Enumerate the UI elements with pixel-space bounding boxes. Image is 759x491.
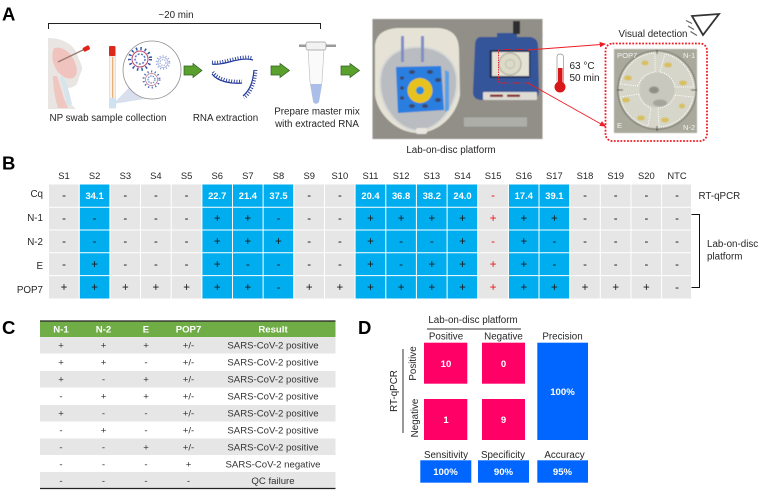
metric: accuracy bbox=[537, 450, 588, 483]
row POP7 values: + bbox=[306, 282, 313, 294]
table row 5 bbox=[58, 408, 319, 420]
table row 8: - bbox=[102, 460, 105, 470]
row POP7 values: + bbox=[337, 282, 344, 294]
header: lab-on-disc platform: Lab-on-disc platform bbox=[428, 315, 518, 326]
row N-1 values: + bbox=[490, 213, 497, 225]
precision block bbox=[537, 343, 588, 440]
metric: specificity: Specificity bbox=[481, 450, 525, 461]
row E values: + bbox=[490, 259, 497, 271]
row Cq values: - bbox=[675, 190, 679, 202]
column headers: S17 bbox=[546, 170, 563, 181]
label: prepare master mix: with extracted RNA bbox=[274, 119, 359, 130]
metric: specificity: 90% bbox=[494, 467, 514, 478]
zoom lines from device to disc bbox=[528, 42, 605, 126]
column headers: S2 bbox=[89, 170, 100, 181]
row POP7 values: + bbox=[153, 282, 160, 294]
row N-1 values: - bbox=[154, 213, 158, 225]
column headers: S7 bbox=[242, 170, 254, 181]
row E values: - bbox=[62, 259, 66, 271]
row Cq values: 17.4 bbox=[515, 190, 534, 201]
arrow 1 bbox=[184, 64, 202, 78]
row Cq values: 21.4 bbox=[239, 190, 258, 201]
table row 6: +/- bbox=[183, 426, 194, 436]
row Cq values: - bbox=[338, 190, 342, 202]
column label: negative: Negative bbox=[484, 332, 523, 342]
table row 6: - bbox=[144, 426, 148, 436]
row Cq values: 36.8 bbox=[392, 190, 410, 201]
row Cq values: 34.1 bbox=[85, 190, 104, 201]
label: 63 °C, 50 min: 63 °C bbox=[570, 61, 595, 72]
table row 7 bbox=[59, 442, 319, 454]
row N-1 values: - bbox=[338, 213, 342, 225]
metric: sensitivity: Sensitivity bbox=[424, 450, 468, 461]
table row 6: - bbox=[59, 426, 63, 436]
panel D: confusion matrix bbox=[358, 315, 588, 483]
table row 3: + bbox=[143, 374, 149, 386]
row N-1 values: + bbox=[245, 213, 252, 225]
column headers: S18 bbox=[577, 170, 593, 181]
cell TP 10: 10 bbox=[441, 359, 451, 370]
row N-2 values: - bbox=[430, 236, 434, 248]
row axis: RT-qPCR bbox=[389, 349, 403, 433]
panel letter A: A bbox=[2, 4, 15, 24]
row Cq values: - bbox=[583, 190, 587, 202]
table row 1 bbox=[58, 340, 319, 352]
row Cq values: 20.4 bbox=[361, 190, 380, 201]
cell FP 1: 1 bbox=[443, 415, 449, 426]
time bracket ~20 min: ~20 min bbox=[158, 10, 194, 21]
row N-2 values: - bbox=[338, 236, 342, 248]
label: RT-qPCR: RT-qPCR bbox=[698, 191, 740, 202]
table row 8: + bbox=[186, 460, 192, 470]
metric: sensitivity bbox=[420, 450, 471, 483]
table row 3: - bbox=[102, 374, 105, 386]
table row 4: SARS-CoV-2 positive bbox=[227, 392, 319, 402]
table row 8 bbox=[59, 460, 320, 470]
illustration: swab tube bbox=[109, 46, 150, 108]
column headers: S6 bbox=[211, 170, 223, 181]
disc labels: N-1 bbox=[683, 51, 695, 60]
row N-2 values: - bbox=[675, 236, 679, 248]
table row 1: + bbox=[58, 340, 64, 352]
row N-2 values: - bbox=[399, 236, 403, 248]
row N-2 values: + bbox=[520, 236, 527, 248]
arrow 2 bbox=[271, 64, 290, 78]
table row 7: + bbox=[143, 442, 149, 454]
table row 7: - bbox=[59, 442, 63, 454]
column headers: S3 bbox=[120, 170, 131, 181]
row Cq values: 22.7 bbox=[208, 190, 226, 201]
row Cq values: - bbox=[62, 190, 66, 202]
row E values: - bbox=[338, 259, 342, 271]
table row 7: +/- bbox=[183, 442, 194, 454]
row N-1 values: - bbox=[307, 213, 311, 225]
metric: specificity bbox=[478, 450, 529, 483]
cell FP 1 bbox=[424, 399, 467, 440]
illustration: microcentrifuge tube with master mix bbox=[299, 42, 336, 104]
row POP7 values: + bbox=[183, 282, 190, 294]
metric: accuracy: 95% bbox=[553, 467, 573, 478]
row Cq values: 24.0 bbox=[453, 190, 472, 201]
row N-1 values: - bbox=[277, 213, 281, 225]
table row 6: SARS-CoV-2 positive bbox=[227, 426, 319, 436]
metric: accuracy: Accuracy bbox=[544, 450, 585, 461]
row E values bbox=[62, 259, 679, 271]
cell TN 9 bbox=[482, 399, 525, 440]
panel A: workflow bbox=[2, 4, 719, 156]
bracket and label: lab-on-disc platform bbox=[692, 214, 758, 288]
row N-2 values bbox=[62, 236, 679, 248]
row labels: N-1 bbox=[27, 213, 43, 224]
label: visual detection: Visual detection bbox=[618, 29, 688, 40]
row E values: - bbox=[583, 259, 587, 271]
table row 9: - bbox=[144, 476, 148, 487]
row labels: E bbox=[36, 261, 43, 272]
table row 4 bbox=[59, 392, 319, 402]
metric: sensitivity: 100% bbox=[433, 467, 458, 478]
row N-2 values: - bbox=[123, 236, 127, 248]
row E values: + bbox=[367, 259, 374, 271]
row N-1 values: - bbox=[123, 213, 127, 225]
row N-2 values: - bbox=[583, 236, 587, 248]
row Cq values: - bbox=[644, 190, 648, 202]
row E values: - bbox=[277, 259, 281, 271]
row E values: - bbox=[399, 259, 403, 271]
column headers: S11 bbox=[363, 170, 378, 181]
row N-1 values: - bbox=[93, 213, 97, 225]
row E values: + bbox=[520, 259, 527, 271]
column label: positive: Positive bbox=[429, 332, 464, 342]
row POP7 values: + bbox=[582, 282, 589, 294]
row N-1 values: + bbox=[428, 213, 435, 225]
row label: negative: Negative bbox=[410, 398, 421, 437]
column headers: S4 bbox=[150, 170, 162, 181]
row Cq values: 39.1 bbox=[545, 190, 564, 201]
row N-1 values: - bbox=[185, 213, 189, 225]
row POP7 values: + bbox=[459, 282, 466, 294]
row N-1 values: - bbox=[675, 213, 679, 225]
column headers: S12 bbox=[393, 170, 409, 181]
table row 8: SARS-CoV-2 negative bbox=[226, 460, 320, 470]
row E values: - bbox=[552, 259, 556, 271]
cell TN 9: 9 bbox=[501, 415, 506, 426]
table row 9: QC failure bbox=[251, 476, 295, 487]
row Cq values: - bbox=[185, 190, 189, 202]
row N-2 values: - bbox=[154, 236, 158, 248]
column headers: S16 bbox=[515, 170, 532, 181]
row N-1 values: + bbox=[214, 213, 221, 225]
row N-2 values: - bbox=[62, 236, 66, 248]
panel letter D: D bbox=[358, 317, 371, 338]
row E values: - bbox=[123, 259, 127, 271]
row POP7 values: + bbox=[122, 282, 129, 294]
row Cq values: - bbox=[491, 190, 495, 202]
row POP7 values: + bbox=[520, 282, 527, 294]
row Cq values: - bbox=[614, 190, 618, 202]
table row 1: SARS-CoV-2 positive bbox=[227, 340, 319, 352]
row POP7 values: + bbox=[367, 282, 374, 294]
row labels: N-2 bbox=[27, 237, 43, 248]
row N-2 values: - bbox=[307, 236, 311, 248]
table row 1: +/- bbox=[183, 340, 194, 352]
panel C: interpretation table bbox=[2, 317, 336, 488]
table row 1: + bbox=[101, 340, 107, 352]
row POP7 values: + bbox=[551, 282, 558, 294]
column headers: S5 bbox=[181, 170, 192, 181]
row N-2 values: - bbox=[185, 236, 189, 248]
row POP7 values bbox=[61, 282, 679, 294]
table row 5: - bbox=[102, 408, 105, 420]
row POP7 values: - bbox=[675, 282, 679, 294]
cell FN 0: 0 bbox=[501, 359, 506, 370]
table row stripes bbox=[40, 337, 336, 488]
row POP7 values: + bbox=[612, 282, 619, 294]
table row 9 bbox=[59, 476, 295, 487]
panel letter C: C bbox=[2, 317, 15, 338]
row E values: - bbox=[185, 259, 189, 271]
row N-1 values: + bbox=[367, 213, 374, 225]
row E values: + bbox=[214, 259, 221, 271]
row N-2 values: - bbox=[491, 236, 495, 248]
illustration: magnified virus particles bbox=[123, 41, 181, 99]
row N-1 values bbox=[62, 213, 679, 225]
column headers: S19 bbox=[607, 170, 624, 181]
table row 7: - bbox=[102, 442, 105, 454]
column headers: NTC bbox=[667, 170, 687, 181]
precision block: 100% bbox=[550, 387, 575, 398]
table row 2 bbox=[58, 358, 319, 368]
table row 2: - bbox=[144, 358, 148, 368]
bracket and label: lab-on-disc platform: Lab-on-disc bbox=[707, 239, 758, 250]
column headers: S15 bbox=[485, 170, 501, 181]
row Cq values: 37.5 bbox=[269, 190, 288, 201]
table row 9: - bbox=[187, 476, 190, 487]
table header: E bbox=[143, 324, 150, 336]
row labels: POP7 bbox=[17, 285, 43, 296]
row Cq values: - bbox=[307, 190, 311, 202]
table row 9: - bbox=[102, 476, 105, 487]
illustration: RNA strands bbox=[212, 57, 256, 98]
arrow 3 bbox=[341, 64, 360, 78]
row E values: - bbox=[614, 259, 618, 271]
row POP7 values: + bbox=[490, 282, 497, 294]
table row 5: + bbox=[58, 408, 64, 420]
table header: Result bbox=[258, 324, 288, 336]
row labels bbox=[17, 189, 43, 296]
row N-2 values: + bbox=[275, 236, 282, 248]
table header: N-2 bbox=[96, 324, 111, 336]
row N-1 values: - bbox=[614, 213, 618, 225]
illustration: NP swab collection from head bbox=[48, 38, 90, 109]
cell TP 10 bbox=[424, 343, 467, 384]
column headers: S20 bbox=[638, 170, 655, 181]
table row 4: + bbox=[143, 392, 149, 402]
row POP7 values: + bbox=[214, 282, 221, 294]
row N-1 values: + bbox=[520, 213, 527, 225]
column headers: S13 bbox=[423, 170, 440, 181]
label: prepare master mix: Prepare master mix bbox=[274, 106, 360, 118]
row N-2 values: - bbox=[552, 236, 556, 248]
row E values: + bbox=[459, 259, 466, 271]
table row 2: + bbox=[58, 358, 64, 368]
label: 63 °C, 50 min: 50 min bbox=[570, 73, 600, 84]
row POP7 values: + bbox=[643, 282, 650, 294]
column label: precision: Precision bbox=[542, 332, 583, 342]
table row 6 bbox=[59, 426, 319, 436]
row POP7 values: + bbox=[428, 282, 435, 294]
row POP7 values: + bbox=[245, 282, 252, 294]
table bottom rule bbox=[40, 488, 336, 490]
row N-2 values: - bbox=[644, 236, 648, 248]
table row 8: - bbox=[59, 460, 63, 470]
table header bbox=[40, 321, 336, 337]
row N-1 values: - bbox=[644, 213, 648, 225]
disc labels bbox=[617, 51, 695, 132]
disc labels: POP7 bbox=[617, 51, 637, 60]
photo: lab-on-disc platform bbox=[372, 19, 542, 139]
icon: eye / viewing cone bbox=[686, 14, 719, 36]
row E values: - bbox=[644, 259, 648, 271]
table header: POP7 bbox=[176, 324, 201, 336]
row E values: + bbox=[428, 259, 435, 271]
label: NP swab sample collection: NP swab sample collection bbox=[50, 113, 166, 124]
row N-2 values: + bbox=[245, 236, 252, 248]
row E values: - bbox=[246, 259, 250, 271]
table row 3: + bbox=[58, 374, 64, 386]
time bracket ~20 min bbox=[48, 10, 320, 29]
label: lab-on-disc platform: Lab-on-disc platform bbox=[406, 145, 496, 156]
photo: detection disc bbox=[614, 49, 697, 133]
row Cq values: 38.2 bbox=[423, 190, 441, 201]
table row 8: - bbox=[144, 460, 148, 470]
column headers: S1 bbox=[58, 170, 70, 181]
table row 4: - bbox=[59, 392, 63, 402]
row N-2 values: + bbox=[459, 236, 466, 248]
bracket and label: lab-on-disc platform: platform bbox=[707, 252, 742, 262]
table row 2: SARS-CoV-2 positive bbox=[227, 358, 319, 368]
table row 6: + bbox=[101, 426, 107, 436]
table row 9: - bbox=[59, 476, 63, 487]
row Cq values bbox=[62, 190, 679, 202]
table row 3: +/- bbox=[183, 374, 194, 386]
row N-2 values: - bbox=[614, 236, 618, 248]
row N-1 values: + bbox=[459, 213, 466, 225]
label: RNA extraction: RNA extraction bbox=[193, 113, 258, 124]
row labels: Cq bbox=[30, 189, 43, 200]
row E values: - bbox=[307, 259, 311, 271]
table row 7: SARS-CoV-2 positive bbox=[227, 442, 319, 454]
column headers bbox=[58, 170, 687, 181]
disc labels: E bbox=[617, 121, 622, 130]
row E values: - bbox=[154, 259, 158, 271]
row Cq values: - bbox=[123, 190, 127, 202]
table header: N-1 bbox=[53, 324, 69, 336]
table row 2: + bbox=[101, 358, 107, 368]
row N-1 values: + bbox=[551, 213, 558, 225]
column headers: S14 bbox=[454, 170, 471, 181]
row axis: RT-qPCR: RT-qPCR bbox=[389, 370, 400, 412]
column headers: S8 bbox=[273, 170, 284, 181]
panel B: sample results table bbox=[2, 152, 758, 299]
table row 5: SARS-CoV-2 positive bbox=[227, 408, 319, 420]
column headers: S9 bbox=[303, 170, 315, 181]
row N-2 values: + bbox=[214, 236, 221, 248]
row POP7 values: + bbox=[398, 282, 405, 294]
icon: thermometer bbox=[554, 54, 566, 92]
table row 1: + bbox=[143, 340, 149, 352]
column headers: S10 bbox=[332, 170, 348, 181]
table row 4: + bbox=[101, 392, 107, 402]
disc sector outlines bbox=[620, 53, 694, 127]
row Cq values: - bbox=[154, 190, 158, 202]
red dotted highlight box bbox=[606, 44, 707, 141]
row N-2 values: + bbox=[367, 236, 374, 248]
row POP7 values: - bbox=[277, 282, 281, 294]
disc labels: N-2 bbox=[683, 123, 695, 132]
row N-2 values: - bbox=[93, 236, 97, 248]
row POP7 values: + bbox=[91, 282, 98, 294]
cell FN 0 bbox=[482, 343, 525, 384]
table row 3 bbox=[58, 374, 319, 386]
row POP7 values: + bbox=[61, 282, 68, 294]
table row 3: SARS-CoV-2 positive bbox=[227, 374, 319, 386]
table row 5: +/- bbox=[183, 408, 194, 420]
table row 2: +/- bbox=[183, 358, 194, 368]
row N-1 values: + bbox=[398, 213, 405, 225]
table grid background bbox=[49, 184, 691, 299]
table row 5: - bbox=[144, 408, 148, 420]
row N-1 values: - bbox=[62, 213, 66, 225]
row E values: - bbox=[675, 259, 679, 271]
row label: positive: Positive bbox=[408, 346, 419, 381]
table row 4: +/- bbox=[183, 392, 194, 402]
row N-1 values: - bbox=[583, 213, 587, 225]
row E values: + bbox=[91, 259, 98, 271]
panel letter B: B bbox=[2, 152, 15, 174]
